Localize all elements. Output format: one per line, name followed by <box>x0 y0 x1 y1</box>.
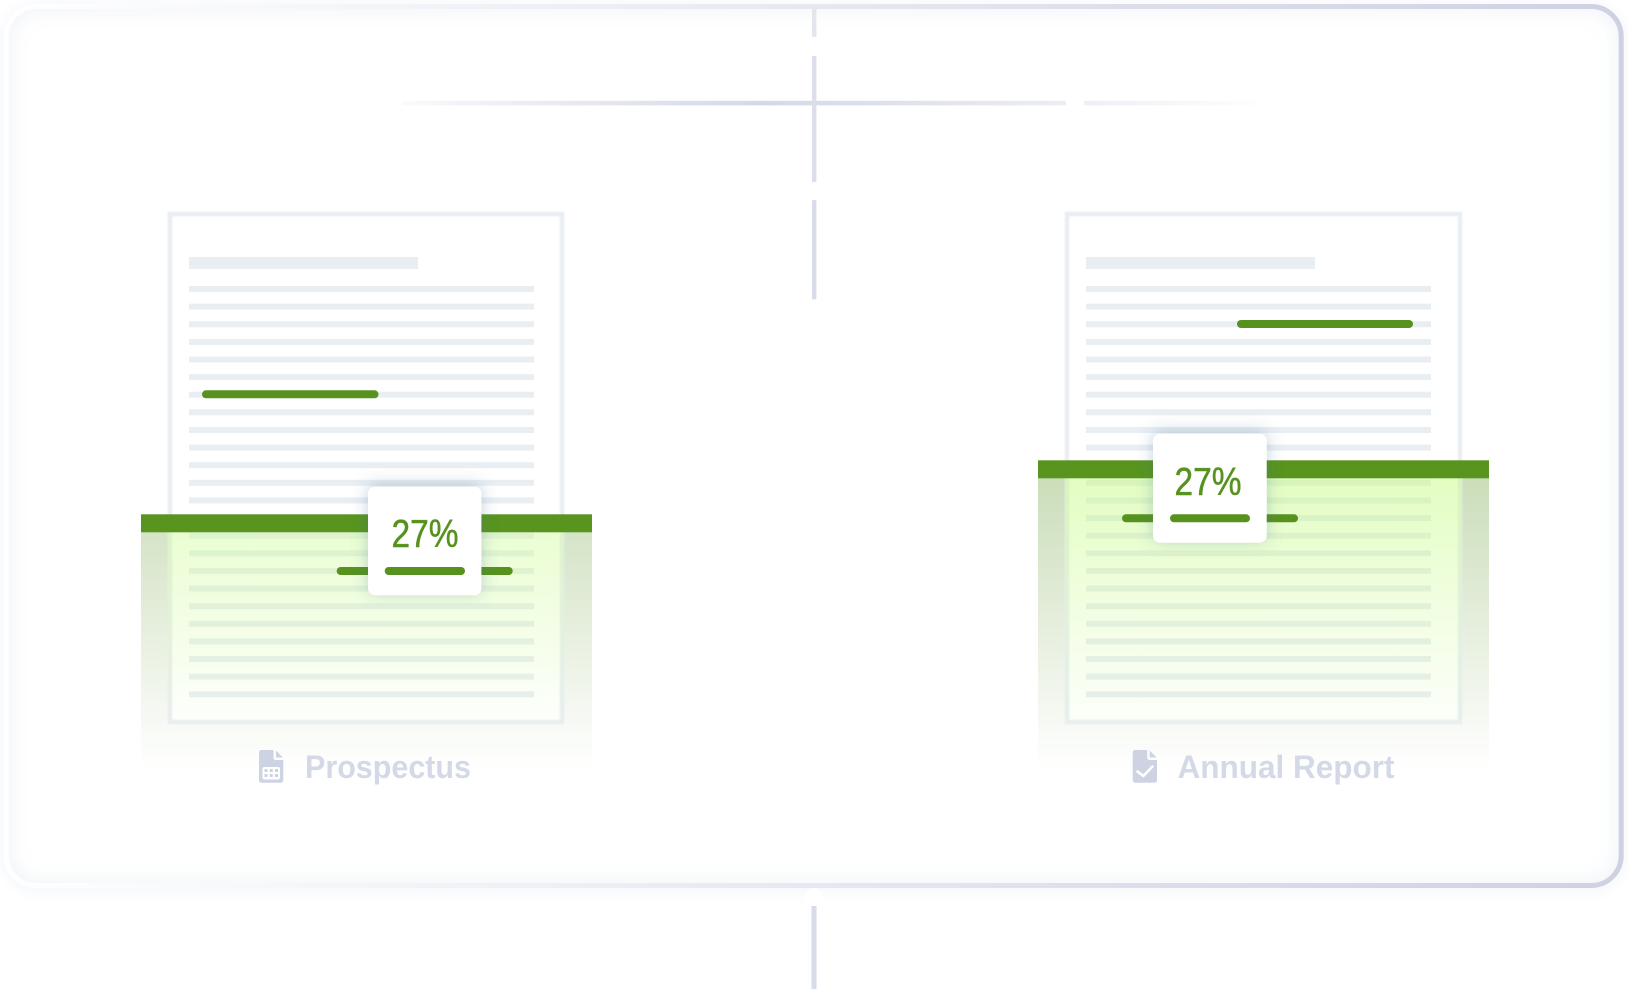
card underline <box>385 567 465 575</box>
highlight band glow <box>141 532 592 770</box>
page title bar <box>1086 257 1315 269</box>
green bar <box>141 514 592 532</box>
green bar <box>1038 460 1489 478</box>
icon: spreadsheet document <box>259 750 283 783</box>
text lines <box>1086 286 1431 697</box>
page <box>170 214 562 722</box>
highlighted sentence 2 <box>337 567 513 575</box>
icon: checked document <box>1133 750 1157 783</box>
callout card <box>368 487 481 595</box>
label: prospectus <box>259 749 471 785</box>
label text: Prospectus <box>305 749 471 785</box>
label text: Annual Report <box>1178 749 1395 785</box>
highlighted sentence 1 <box>1237 320 1413 328</box>
horizontal connector <box>402 101 1260 105</box>
card underline <box>1170 514 1250 522</box>
label: annual report <box>1133 749 1395 785</box>
highlight band glow <box>1038 478 1489 770</box>
highlighted sentence 1 <box>202 390 378 398</box>
callout card <box>1153 434 1267 543</box>
page title bar <box>189 257 418 269</box>
page <box>1067 214 1460 722</box>
vertical connector <box>805 9 823 989</box>
text lines <box>189 286 534 697</box>
lime tint <box>1065 478 1462 724</box>
document: annual report <box>1038 214 1489 770</box>
lime tint <box>168 532 564 724</box>
document: prospectus <box>141 214 592 770</box>
percentage: 27% <box>392 513 458 556</box>
highlighted sentence 2 <box>1122 514 1298 522</box>
percentage: 27% <box>1174 461 1242 504</box>
